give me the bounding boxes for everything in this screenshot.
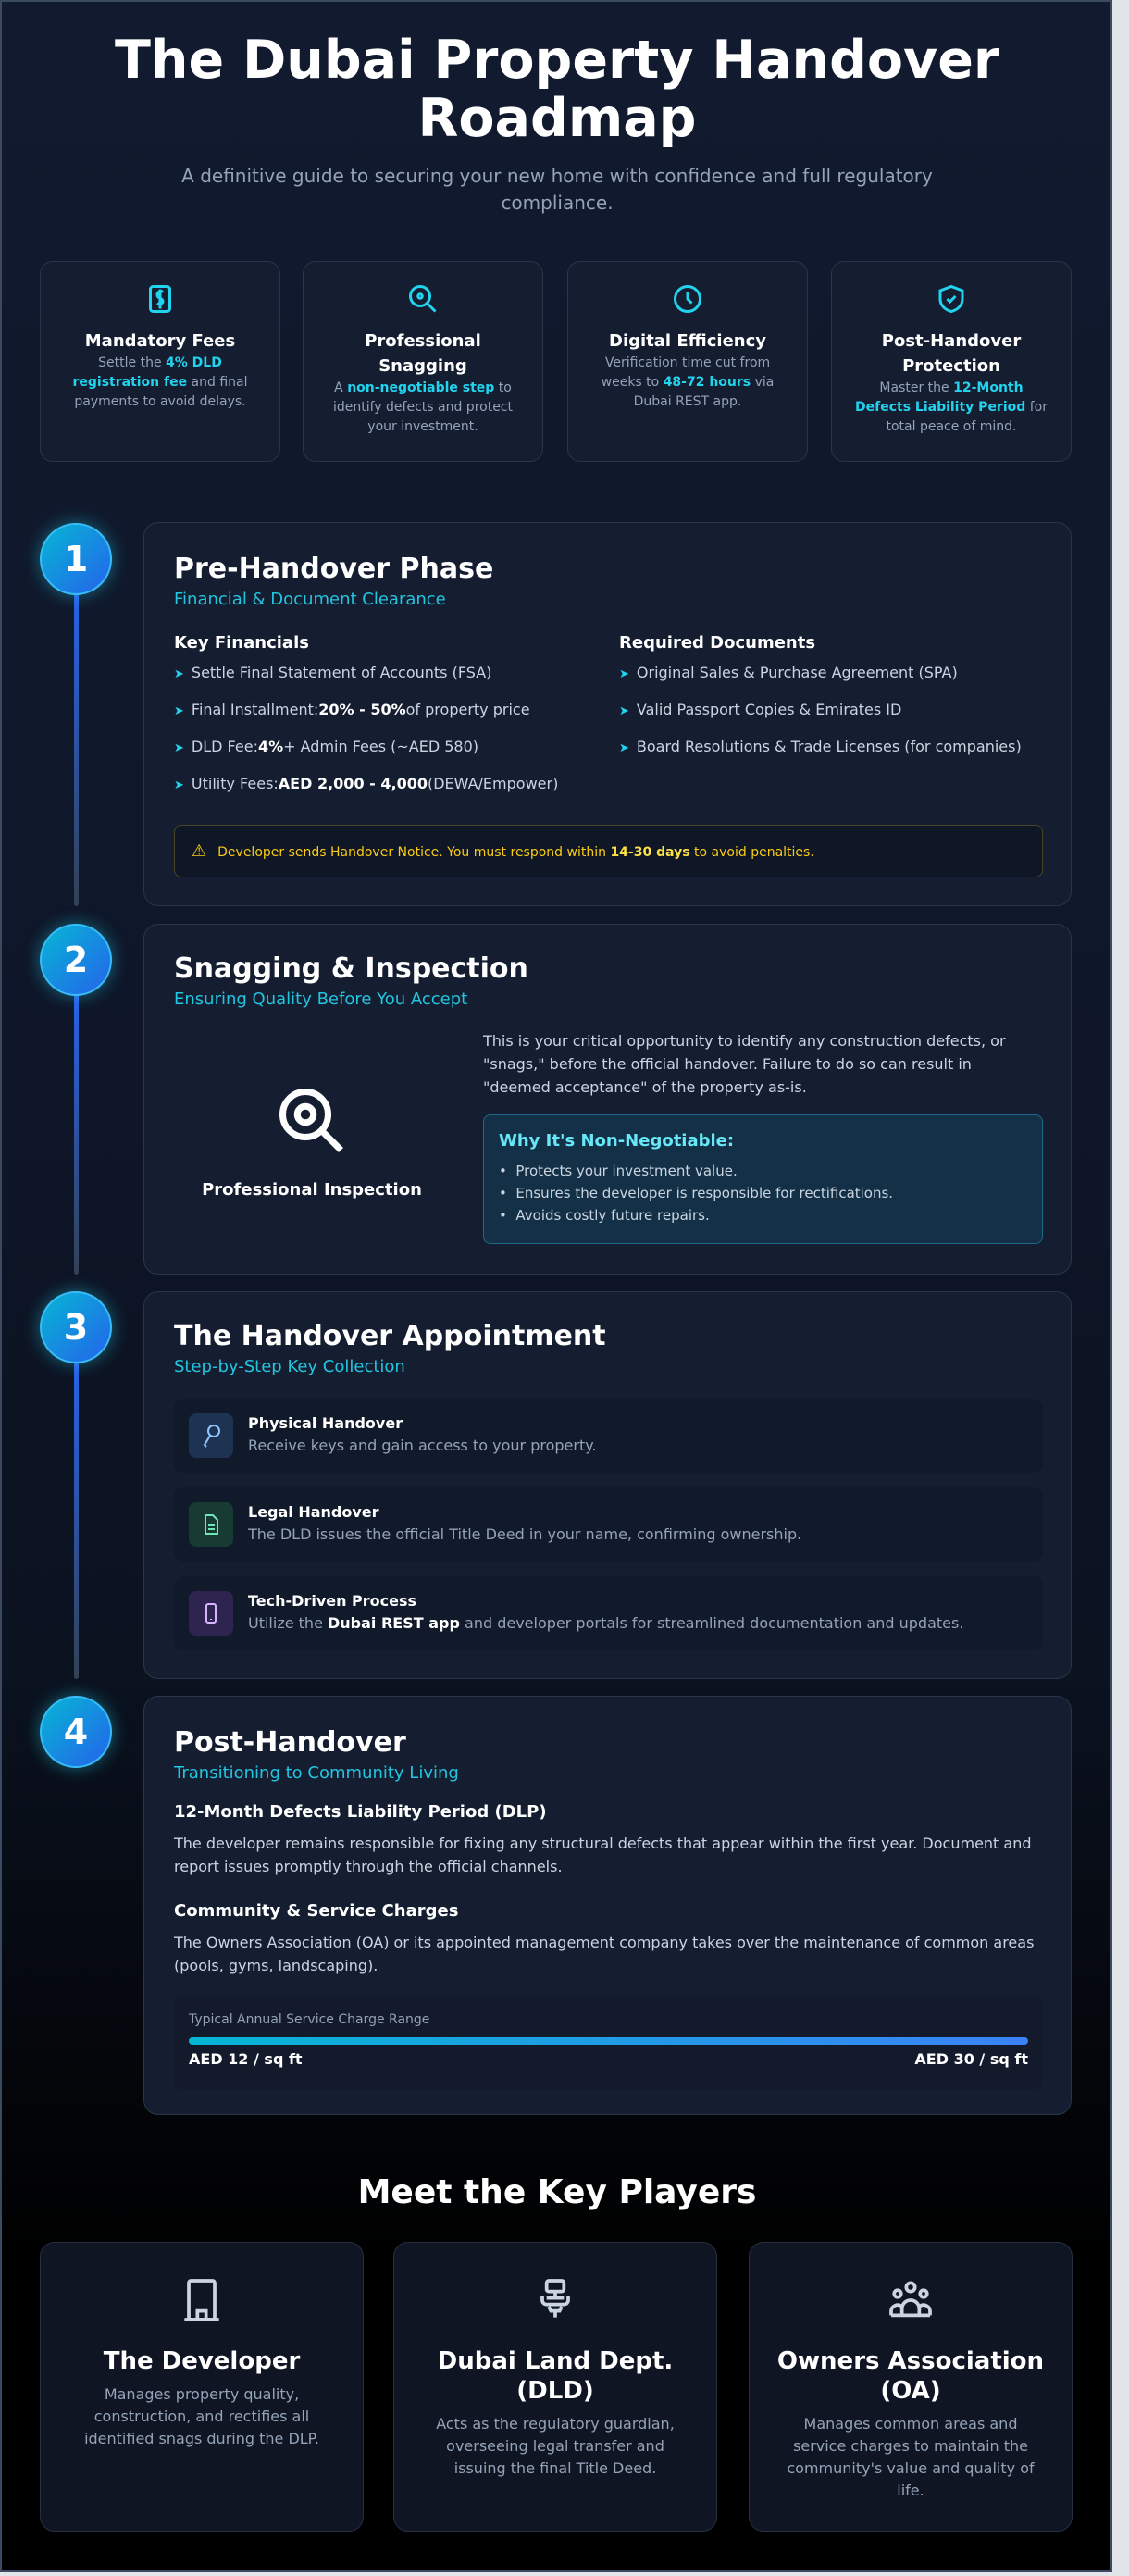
player card: DLD: [393, 2242, 717, 2532]
item: legal handover: The DLD issues the official Title Deed in your name, confirming ownership.: [248, 1525, 801, 1543]
item: tech-driven: [174, 1576, 1043, 1650]
key financials: DLD Fee:4%+ Admin Fees (~AED 580): [192, 738, 478, 755]
icon: document: [189, 1502, 233, 1547]
panel: pre-handover: Financial & Document Clearance: [174, 590, 446, 609]
feature card: protection: [831, 261, 1072, 462]
panel: post-handover: Transitioning to Community Living: [174, 1763, 459, 1783]
panel: handover appointment: [143, 1291, 1072, 1679]
callout: why non-negotiable: Why It's Non-Negotiable:: [499, 1131, 734, 1151]
feature card: protection: Master the 12-Month: [879, 380, 1024, 395]
panel: handover appointment: The Handover Appointment: [174, 1320, 606, 1352]
player card: developer: [40, 2242, 364, 2532]
panel: post-handover: Post-Handover: [174, 1726, 406, 1759]
heading: key players: Meet the Key Players: [358, 2173, 756, 2211]
callout: why non-negotiable: [483, 1114, 1043, 1244]
feature card: protection: Defects Liability Period for: [855, 400, 1048, 415]
key financials: Final Installment:20% - 50%of property price: [192, 701, 530, 718]
icon: clock: [674, 285, 701, 313]
chart: service charge range: [174, 1996, 1043, 2090]
feature card: protection: Protection: [902, 356, 1000, 376]
panel: snagging: [143, 924, 1072, 1275]
required documents: [619, 633, 1022, 755]
panel: post-handover: The Owners Association (OA) or its appointed management company takes over the maintenance of common areas (pools, gyms, landscaping).: [174, 1934, 1034, 1974]
step circle 1: 1: [64, 539, 88, 579]
key financials: [174, 633, 558, 792]
step circle 3: 3: [64, 1307, 88, 1348]
callout: why non-negotiable: • Protects your investment value.: [499, 1163, 738, 1179]
icon: key: [189, 1413, 233, 1458]
required documents: Valid Passport Copies & Emirates ID: [637, 701, 901, 718]
player card: developer: Manages property quality, construction, and rectifies all identified snags during the DLP.: [84, 2385, 319, 2447]
subtitle: A definitive guide to securing your new home with confidence and full regulatory compliance.: [181, 165, 933, 214]
icon: people: [889, 2281, 932, 2318]
feature card: protection: Post-Handover: [882, 331, 1021, 351]
panel: post-handover: 12-Month Defects Liability Period (DLP): [174, 1802, 547, 1822]
panel: handover appointment: Step-by-Step Key Collection: [174, 1357, 405, 1376]
feature card: snagging: [303, 261, 543, 462]
callout: why non-negotiable: • Avoids costly future repairs.: [499, 1207, 710, 1224]
feature card: mandatory fees: [40, 261, 280, 462]
item: tech-driven: Tech-Driven Process: [248, 1592, 416, 1610]
player card: OA: Manages common areas and service charges to maintain the community's value and quality of life.: [787, 2415, 1035, 2499]
title: Roadmap: [418, 88, 696, 149]
feature card: snagging: Professional Snagging: [365, 331, 481, 376]
item: physical handover: Physical Handover: [248, 1414, 403, 1432]
feature card: digital: Verification time cut from weeks to 48-72 hours via Dubai REST app.: [602, 355, 774, 409]
key financials: Settle Final Statement of Accounts (FSA): [192, 664, 491, 681]
panel: post-handover: [143, 1696, 1072, 2115]
icon: building: [184, 2279, 219, 2321]
item: legal handover: [174, 1487, 1043, 1562]
callout: handover notice: [174, 825, 1043, 877]
step circle 3: [40, 1291, 112, 1363]
panel: pre-handover: Pre-Handover Phase: [174, 553, 493, 585]
icon: inspection: Professional Inspection: [202, 1180, 422, 1200]
icon: phone: [189, 1591, 233, 1636]
timeline line 2: [74, 992, 79, 1275]
feature card: digital: [567, 261, 808, 462]
timeline line 3: [74, 1360, 79, 1679]
step circle 1: [40, 523, 112, 595]
icon: shield: [938, 285, 964, 313]
panel: snagging: Ensuring Quality Before You Accept: [174, 989, 467, 1009]
title: The Dubai Property Handover: [115, 30, 999, 91]
timeline line 1: [74, 591, 79, 906]
player card: DLD: Acts as the regulatory guardian, overseeing legal transfer and issuing the final Title Deed.: [436, 2415, 675, 2477]
required documents: Original Sales & Purchase Agreement (SPA): [637, 664, 958, 681]
key financials: Utility Fees:AED 2,000 - 4,000(DEWA/Empower): [192, 775, 558, 792]
required documents: Required Documents: [619, 633, 815, 653]
step circle 4: [40, 1696, 112, 1768]
title: [115, 30, 999, 149]
item: physical handover: Receive keys and gain access to your property.: [248, 1437, 596, 1454]
text: description: This is your critical opportunity to identify any construction defects, or "snags," before the official handover. Failure to do so can result in "deemed acceptance" of the property as-is.: [483, 1032, 1006, 1096]
step circle 4: 4: [64, 1711, 88, 1752]
key financials: Key Financials: [174, 633, 309, 653]
item: physical handover: [174, 1399, 1043, 1473]
required documents: Board Resolutions & Trade Licenses (for companies): [637, 738, 1022, 755]
callout: why non-negotiable: • Ensures the developer is responsible for rectifications.: [499, 1185, 893, 1201]
item: tech-driven: Utilize the Dubai REST app and developer portals for streamlined documentation and updates.: [248, 1614, 963, 1632]
player card: developer: The Developer: [104, 2347, 300, 2375]
feature card: mandatory fees: Mandatory Fees: [85, 331, 235, 351]
icon: inspection: [202, 1089, 422, 1200]
item: legal handover: Legal Handover: [248, 1503, 379, 1521]
feature card: snagging: A non-negotiable step to identify defects and protect your investment.: [333, 380, 513, 434]
chart: service charge range: Typical Annual Service Charge Range: [189, 2012, 429, 2027]
icon: magnifier: [409, 285, 437, 313]
feature card: protection: total peace of mind.: [887, 419, 1016, 434]
icon: chair: [540, 2279, 570, 2318]
step circle 2: 2: [64, 940, 88, 980]
chart: service charge range: AED 30 / sq ft: [914, 2050, 1028, 2068]
player card: OA: Owners Association (OA): [777, 2347, 1044, 2405]
feature card: mandatory fees: Settle the 4% DLD registration fee and final payments to avoid delays.: [72, 355, 248, 409]
panel: post-handover: Community & Service Charges: [174, 1901, 458, 1921]
step circle 2: [40, 924, 112, 996]
player card: OA: [749, 2242, 1073, 2532]
panel: post-handover: The developer remains responsible for fixing any structural defects that appear within the first year. Document and report issues promptly through the official channels.: [174, 1835, 1032, 1875]
feature card: digital: Digital Efficiency: [609, 331, 766, 351]
panel: pre-handover: [143, 522, 1072, 906]
callout: handover notice: ⚠ Developer sends Handover Notice. You must respond within 14-30 days to avoid penalties.: [192, 841, 814, 861]
panel: snagging: Snagging & Inspection: [174, 952, 528, 985]
player card: DLD: Dubai Land Dept. (DLD): [438, 2347, 673, 2405]
chart: service charge range: AED 12 / sq ft: [189, 2050, 303, 2068]
icon: fees: [149, 285, 171, 313]
